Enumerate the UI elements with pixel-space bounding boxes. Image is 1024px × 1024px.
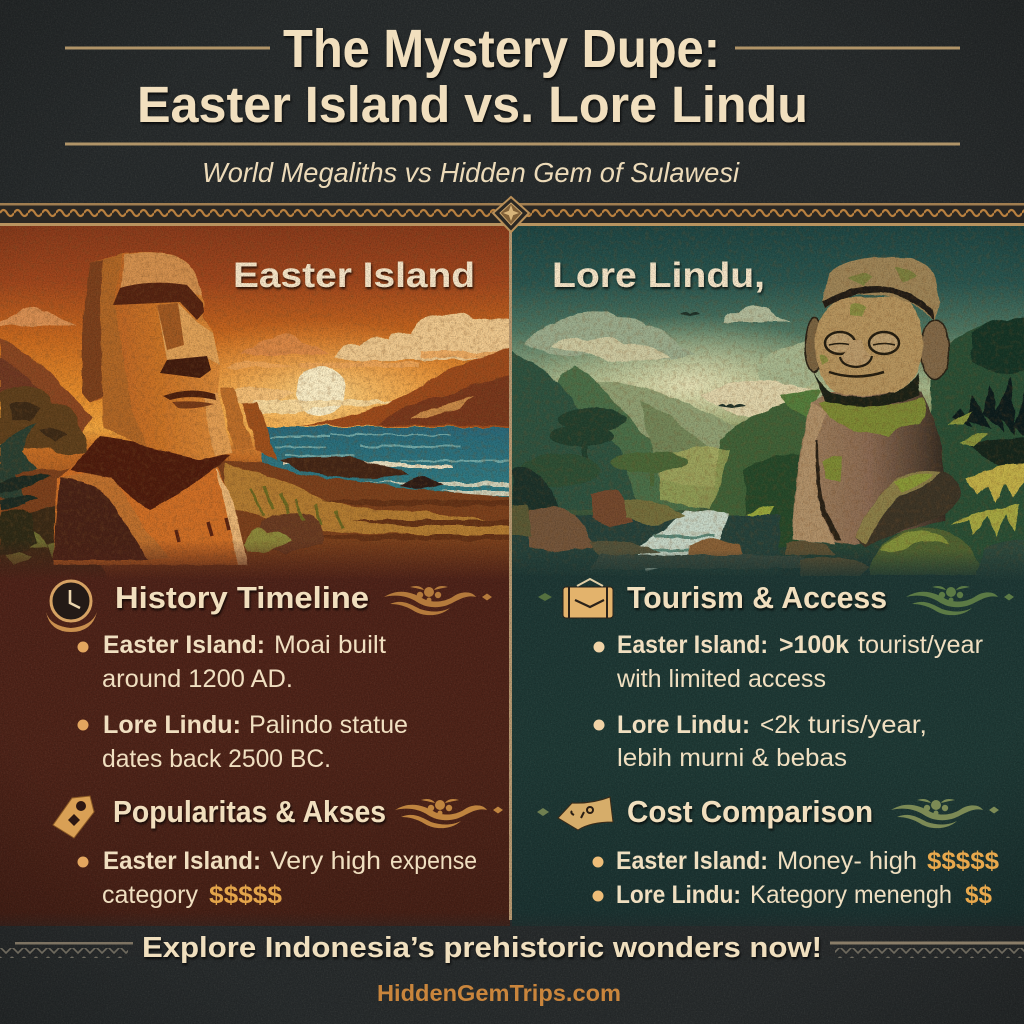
bullet: Easter Island: $$$$$ <box>209 881 282 909</box>
bush and palm <box>0 386 86 555</box>
icon: cash <box>558 797 613 830</box>
bullet: Lore Lindu: Kategory <box>750 881 847 909</box>
bullet: Lore Lindu <box>78 711 408 773</box>
moai neck shadow <box>70 436 230 510</box>
bullet: Lore Lindu: turis/year, <box>808 711 927 739</box>
bullet: Easter Island: around 1200 AD. <box>102 665 293 693</box>
bullet: Lore Lindu: Lore Lindu: <box>616 881 741 909</box>
icon: price tag <box>53 796 94 838</box>
scene: jungle valley <box>505 307 1024 575</box>
section: Tourism & Access <box>538 579 1014 772</box>
statue head shadow <box>814 372 920 408</box>
bullet: Easter Island: Easter Island: <box>617 631 768 659</box>
river and rocks <box>512 490 820 575</box>
title <box>137 19 808 133</box>
clouds: sunset sky <box>0 308 513 405</box>
panel: Lore Lindu <box>505 226 1024 926</box>
trees <box>520 408 688 487</box>
heading: Cost Comparison <box>627 794 873 829</box>
bullet: Lore Lindu: <2k <box>760 711 800 739</box>
scene: sunset landscape <box>0 308 520 590</box>
moai lips <box>163 390 216 400</box>
ornamental band <box>0 197 1024 232</box>
statue arm <box>792 403 835 544</box>
birds <box>680 312 746 408</box>
flourish <box>891 799 999 828</box>
bullet: Lore Lindu: Lore Lindu: <box>103 711 241 739</box>
palindo statue <box>786 257 1024 580</box>
heading: Tourism & Access <box>627 580 887 615</box>
text panel <box>512 582 1024 926</box>
flourish <box>906 586 1014 615</box>
moai statue <box>53 252 248 565</box>
bullet: Easter Island <box>78 631 386 693</box>
bullet: Easter Island: expense <box>390 847 477 875</box>
paint texture <box>0 226 510 566</box>
section: Cost Comparison <box>537 794 999 909</box>
bullet: Lore Lindu: menengh <box>854 881 952 909</box>
bullet: Easter Island: Very high <box>270 847 381 875</box>
bullet: Easter Island <box>592 847 999 875</box>
bullet: Lore Lindu: dates back 2500 BC. <box>102 745 331 773</box>
fade at panel bottoms <box>0 912 1024 956</box>
sun <box>245 365 395 415</box>
statue knee <box>855 471 961 548</box>
mountains <box>505 348 810 525</box>
statue body <box>792 392 945 545</box>
bullet: Lore Lindu: lebih murni & bebas <box>617 744 847 772</box>
title rules <box>65 46 960 146</box>
icon: clock <box>46 581 97 632</box>
headland <box>302 348 515 427</box>
small diamond <box>538 593 552 601</box>
title: Easter Island vs. Lore Lindu <box>137 76 808 133</box>
bullet: Lore Lindu: $$ <box>965 881 992 909</box>
bullet: Easter Island: category <box>102 881 198 909</box>
moai head <box>82 252 232 460</box>
bullet: Lore Lindu <box>594 711 927 772</box>
moai chest marks <box>176 518 229 542</box>
bullet: Easter Island: tourist/year <box>858 631 983 659</box>
right jungle <box>512 318 1024 570</box>
heading: Easter Island: Easter Island <box>233 256 475 295</box>
small diamond <box>537 808 549 816</box>
statue hat <box>822 257 940 320</box>
bullet: Easter Island: >100k <box>779 631 849 659</box>
statue foot moss rock <box>870 527 985 575</box>
bullet: Easter Island <box>594 631 983 693</box>
moai brow shadow <box>113 283 204 320</box>
ground and grass <box>0 456 509 571</box>
fade to text panel <box>512 550 1024 582</box>
bullet: Easter Island: Easter Island: <box>616 847 768 875</box>
fade to text panel <box>0 540 510 580</box>
sea <box>262 427 520 502</box>
call to action: Explore Indonesia’s prehistoric wonders now! <box>142 932 822 964</box>
subtitle: World Megaliths vs Hidden Gem of Sulawesi <box>202 157 740 188</box>
moai nose <box>157 303 220 365</box>
heading: Popularitas & Akses <box>113 794 386 829</box>
icon: suitcase <box>563 579 613 618</box>
bullet: Easter Island: Money- high <box>777 847 917 875</box>
paint texture <box>512 226 1024 576</box>
text panel <box>0 580 510 926</box>
bullet: Easter Island: Easter Island: <box>103 847 261 875</box>
moai nostril <box>160 356 211 378</box>
panel: Easter Island <box>0 226 520 926</box>
bullet: Easter Island: Easter Island: <box>103 631 265 659</box>
title: The Mystery Dupe: <box>283 19 720 79</box>
section: History Timeline <box>46 580 492 773</box>
left mountains <box>0 338 92 443</box>
bullet: Easter Island: Moai built <box>274 631 386 659</box>
clouds: misty sky <box>525 307 820 420</box>
flourish <box>384 586 492 615</box>
section: Popularitas & Akses <box>53 794 503 909</box>
statue moss <box>818 397 926 482</box>
band centre diamond <box>493 197 529 232</box>
flourish <box>395 799 503 828</box>
bullet: Lore Lindu: Lore Lindu: <box>617 711 750 739</box>
footer rules <box>0 942 1024 958</box>
bullet: Lore Lindu: Palindo statue <box>249 711 408 739</box>
moai body <box>53 460 238 566</box>
statue face <box>825 332 899 376</box>
bullet: Easter Island: $$$$$ <box>927 847 999 875</box>
back moai <box>220 388 277 460</box>
bullet: Easter Island <box>78 847 477 909</box>
centre divider <box>509 226 512 920</box>
heading: History Timeline <box>115 580 369 615</box>
heading: Lore Lindu: Lore Lindu, <box>552 256 765 295</box>
bullet: Easter Island: with limited access <box>616 665 826 693</box>
website: HiddenGemTrips.com <box>377 980 621 1006</box>
moai side <box>82 260 106 403</box>
bullet: Lore Lindu <box>592 881 992 909</box>
statue ears <box>805 318 823 372</box>
statue head <box>815 297 923 396</box>
